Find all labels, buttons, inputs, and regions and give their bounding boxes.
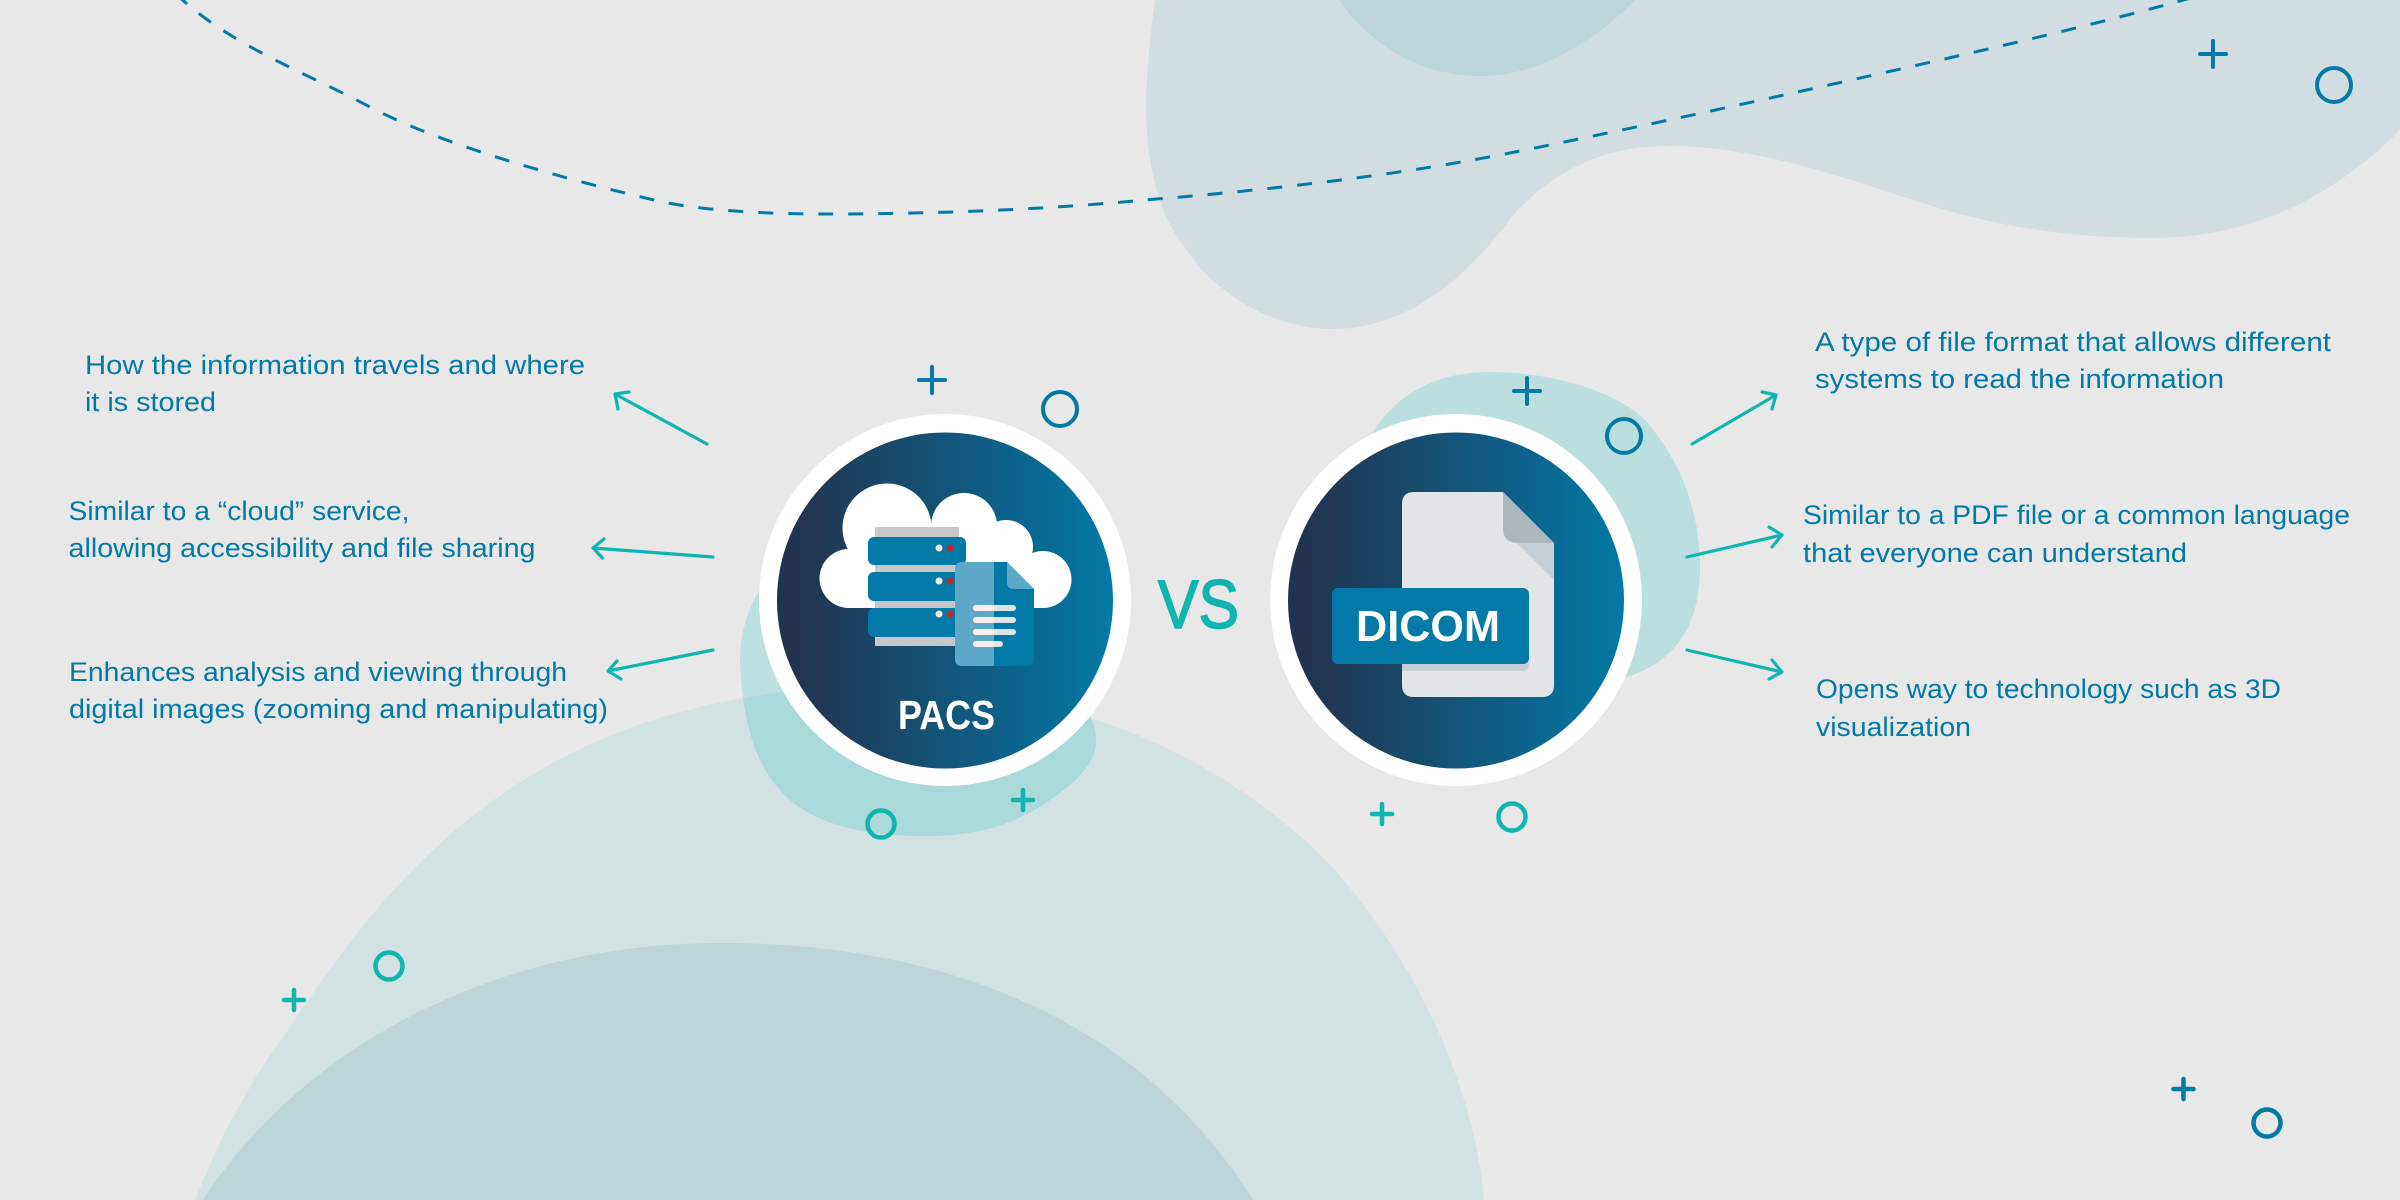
marker: plus above PACS bbox=[919, 367, 945, 393]
DICOM point 1: A type of file format that allows different bbox=[1815, 327, 2332, 357]
blob behind DICOM bbox=[1373, 372, 1700, 677]
DICOM point 1: systems to read the information bbox=[1815, 364, 2224, 394]
PACS point 3: digital images (zooming and manipulating) bbox=[69, 694, 608, 724]
icon: server stack bbox=[868, 527, 966, 646]
PACS point 1: it is stored bbox=[85, 387, 216, 417]
marker: plus below PACS bbox=[1013, 790, 1033, 810]
PACS point 2: Similar to a “cloud” service, bbox=[68, 496, 410, 526]
DICOM point 3: visualization bbox=[1816, 712, 1971, 742]
arrow: DICOM point 3 bbox=[1687, 650, 1782, 679]
PACS point 3: Enhances analysis and viewing through bbox=[69, 657, 567, 687]
PACS point 3 bbox=[69, 657, 608, 724]
marker: circle top right bbox=[2317, 68, 2351, 102]
DICOM label: DICOM bbox=[1356, 602, 1500, 651]
bottom large blob bbox=[195, 688, 1484, 1200]
PACS point 1 bbox=[85, 350, 585, 417]
icon: document bbox=[955, 562, 1034, 666]
DICOM point 3: Opens way to technology such as 3D bbox=[1816, 674, 2281, 704]
marker: circle above DICOM bbox=[1607, 419, 1641, 453]
arrow: DICOM point 2 bbox=[1687, 527, 1782, 557]
dashed curve bbox=[176, 0, 2205, 214]
arrow: PACS point 3 bbox=[608, 650, 713, 679]
PACS point 1: How the information travels and where bbox=[85, 350, 585, 380]
DICOM point 1 bbox=[1815, 327, 2332, 394]
PACS gradient disc bbox=[777, 432, 1113, 768]
top inner blob bbox=[1339, 0, 1635, 76]
DICOM tag bbox=[1332, 588, 1529, 664]
icon: file page bbox=[1402, 492, 1554, 697]
DICOM point 2 bbox=[1803, 500, 2350, 568]
marker: circle bottom right bbox=[2254, 1110, 2280, 1136]
icon: cloud bbox=[820, 484, 1072, 608]
arrow: PACS point 2 bbox=[593, 539, 713, 558]
marker: plus bottom left bbox=[284, 990, 304, 1010]
VS label: VS bbox=[1158, 566, 1239, 643]
DICOM gradient disc bbox=[1288, 432, 1624, 768]
PACS label: PACS bbox=[898, 692, 995, 738]
marker: plus below DICOM bbox=[1372, 804, 1392, 824]
DICOM badge bbox=[1270, 414, 1642, 786]
marker: circle bottom left bbox=[376, 952, 402, 980]
DICOM white ring bbox=[1270, 414, 1642, 786]
PACS white ring bbox=[759, 414, 1131, 786]
marker: plus above DICOM bbox=[1514, 378, 1540, 404]
PACS point 2 bbox=[68, 496, 536, 563]
marker: plus bottom right bbox=[2174, 1079, 2194, 1099]
top right background blob bbox=[1146, 0, 2400, 329]
arrow: DICOM point 1 bbox=[1692, 392, 1776, 444]
marker: circle below DICOM bbox=[1498, 804, 1526, 830]
DICOM point 3 bbox=[1816, 674, 2281, 742]
bottom inner blob bbox=[200, 943, 1256, 1200]
blob behind PACS bbox=[740, 575, 1096, 836]
PACS point 2: allowing accessibility and file sharing bbox=[68, 533, 536, 563]
marker: circle below PACS bbox=[868, 810, 894, 838]
DICOM point 2: Similar to a PDF file or a common language bbox=[1803, 500, 2350, 530]
marker: plus top right bbox=[2200, 41, 2226, 67]
PACS badge bbox=[759, 414, 1131, 786]
DICOM point 2: that everyone can understand bbox=[1803, 538, 2187, 568]
arrow: PACS point 1 bbox=[615, 392, 707, 444]
marker: circle above PACS bbox=[1043, 392, 1077, 426]
